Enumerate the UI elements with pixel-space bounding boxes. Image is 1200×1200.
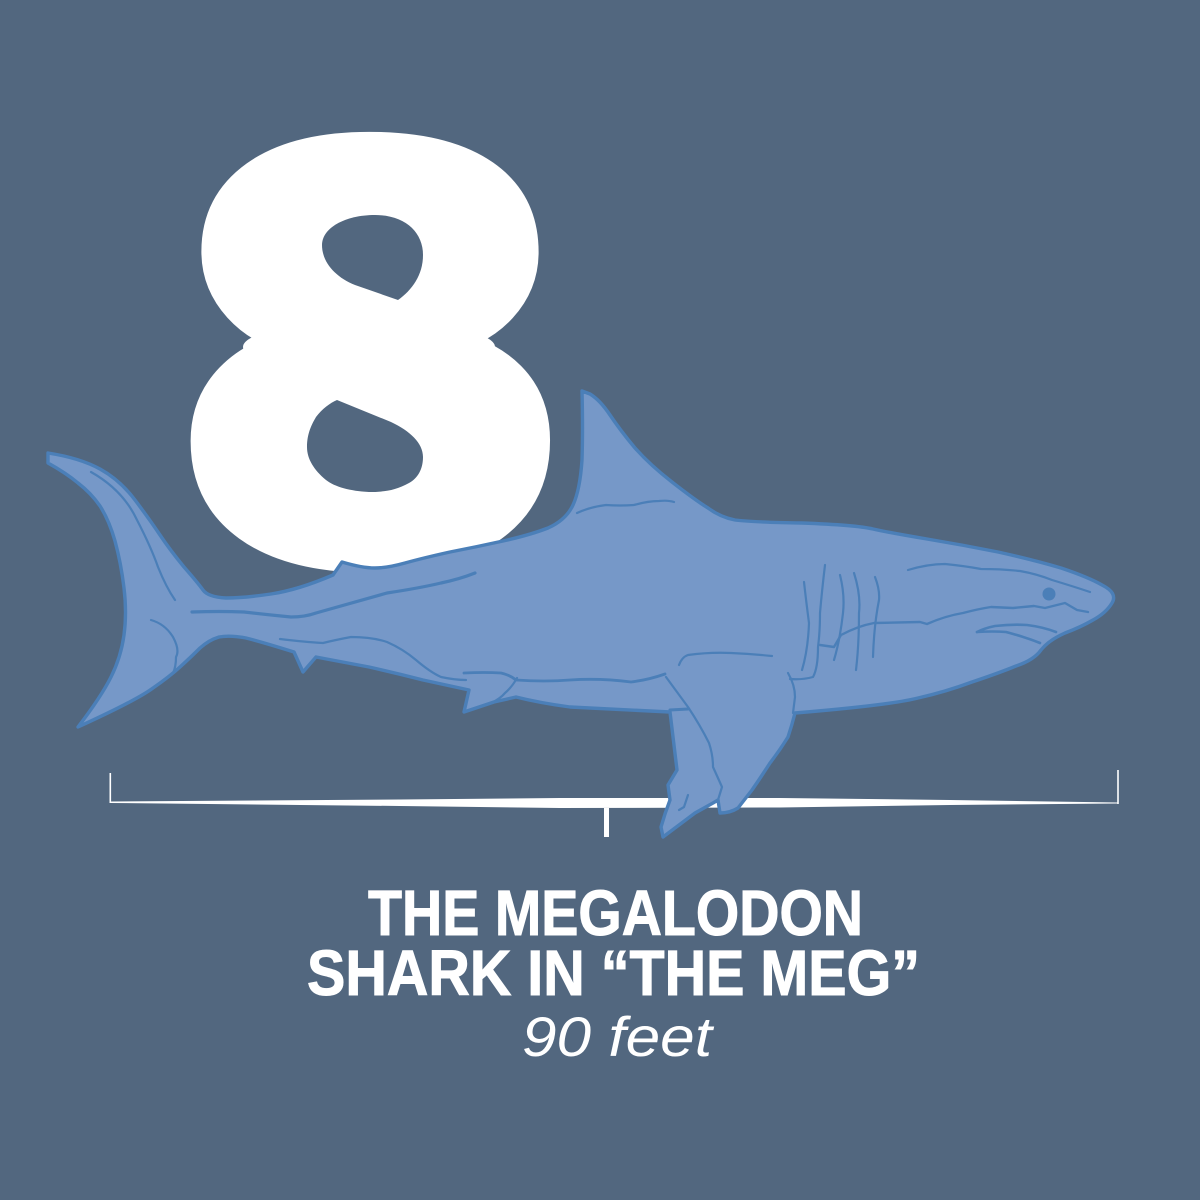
shark detail lines — [91, 472, 1090, 810]
length scale bar — [110, 770, 1119, 837]
megalodon shark — [48, 391, 1114, 837]
caption heading: THE MEGALODON — [368, 877, 863, 949]
caption heading — [307, 877, 920, 1009]
shark eye — [1042, 588, 1056, 600]
big number 8: 8 — [184, 24, 556, 679]
shark body silhouette — [48, 391, 1114, 837]
length caption: 90 feet — [522, 1005, 715, 1068]
caption heading: SHARK IN “THE MEG” — [307, 937, 920, 1009]
